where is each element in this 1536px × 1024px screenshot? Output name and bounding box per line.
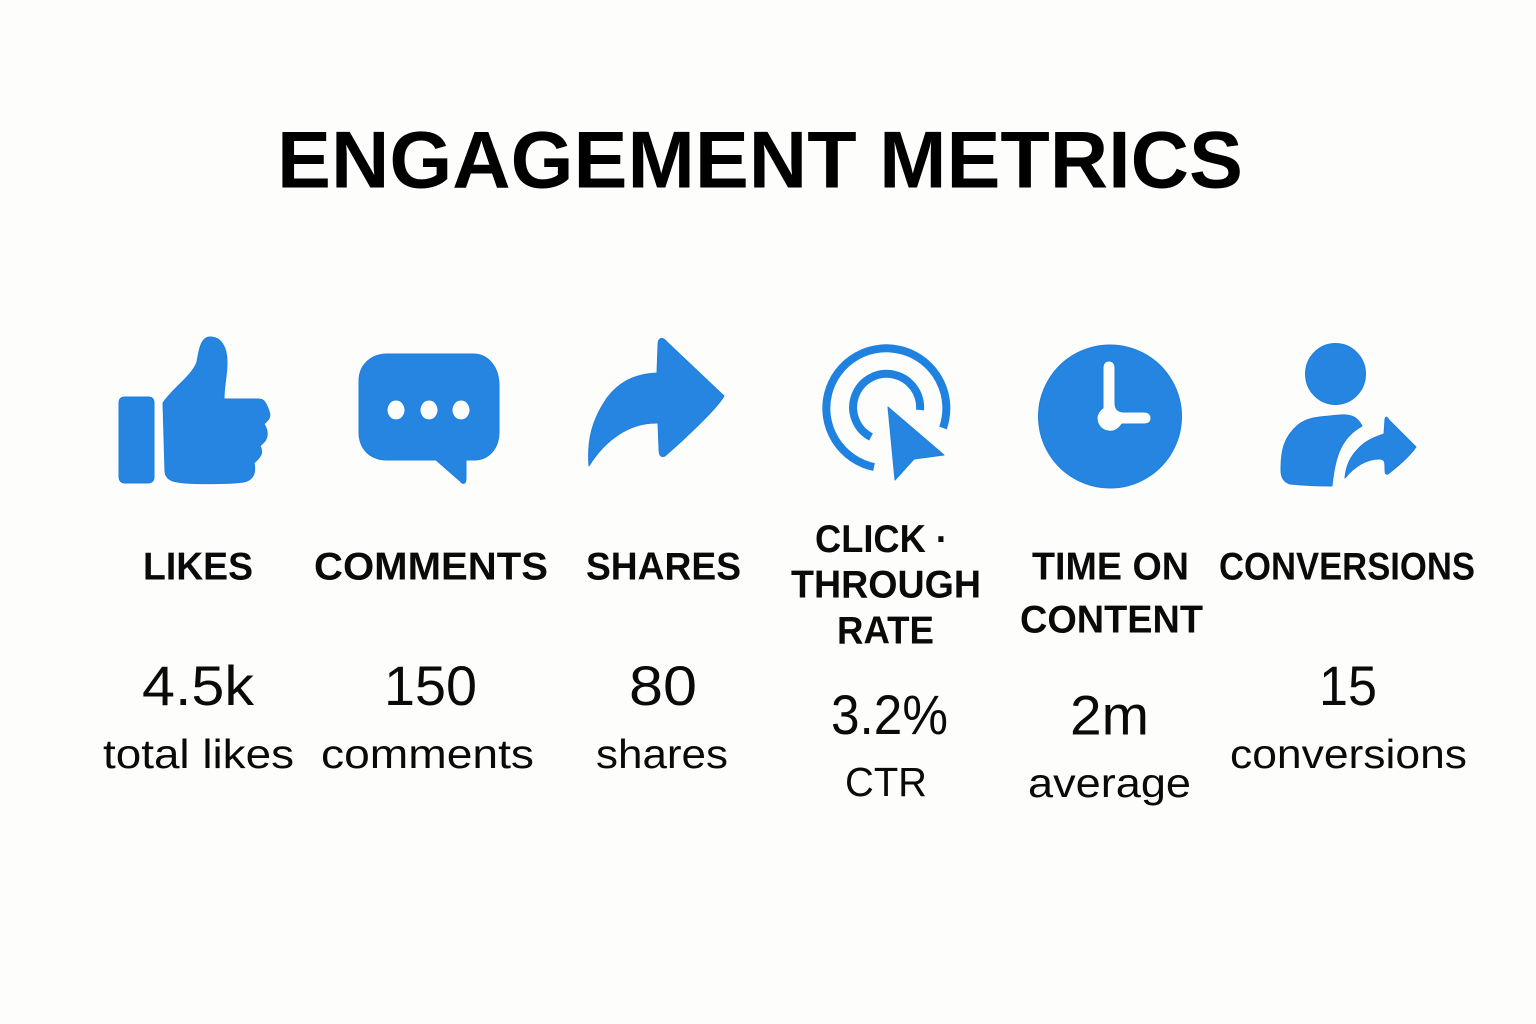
label: likes: LIKES [143, 546, 253, 588]
title: ENGAGEMENT METRICS [277, 116, 1243, 206]
caption: average: average [1028, 760, 1191, 806]
caption: comments: comments [321, 731, 534, 777]
panel: time on content [1020, 345, 1203, 806]
caption: total likes: total likes [103, 731, 294, 777]
caption: CTR: CTR [845, 759, 927, 805]
icon: person with arrow [1281, 344, 1416, 486]
value: 4.5k: 4.5k [142, 654, 255, 717]
value: 3.2%: 3.2% [831, 683, 948, 746]
caption: conversions: conversions [1230, 731, 1467, 777]
label: conversions: CONVERSIONS [1219, 546, 1475, 588]
label: click-through rate: CLICK · [815, 518, 948, 561]
label: shares: SHARES [586, 546, 741, 588]
label: click-through rate: RATE [837, 610, 934, 652]
label: time on content: TIME ON [1032, 546, 1189, 588]
panel: shares [586, 338, 741, 777]
label: click-through rate: THROUGH [791, 564, 981, 606]
icon: share arrow [589, 338, 724, 466]
label: comments: COMMENTS [314, 546, 548, 588]
value: 150: 150 [384, 654, 477, 717]
label: time on content [1020, 546, 1203, 642]
value: 80: 80 [629, 654, 697, 717]
value: 15: 15 [1319, 654, 1377, 717]
label: time on content: CONTENT [1020, 598, 1203, 642]
value: 2m: 2m [1070, 684, 1149, 746]
panel: conversions [1219, 344, 1475, 777]
caption: shares: shares [596, 731, 728, 777]
label: click-through rate [791, 518, 981, 652]
panel: comments [314, 354, 548, 777]
icon: thumbs up [119, 337, 270, 484]
panel: click-through rate [791, 348, 981, 805]
icon: clock [1039, 345, 1182, 488]
panel: likes [103, 337, 294, 777]
icon: cursor with click rings [826, 348, 946, 480]
icon: speech bubble [359, 354, 499, 483]
